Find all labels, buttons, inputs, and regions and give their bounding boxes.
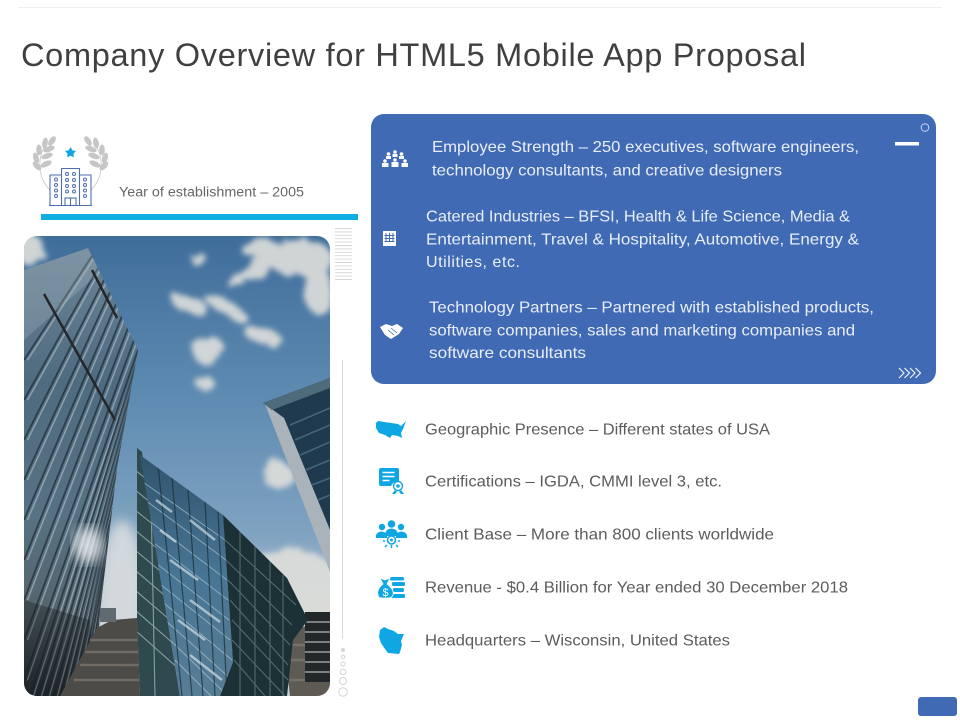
text: employee strength xyxy=(432,139,859,180)
text: employee strength: technology consultants, and creative designers xyxy=(432,162,782,180)
text: technology partners: Technology Partners – Partnered with established products, xyxy=(429,300,874,316)
icon: handshake xyxy=(380,324,403,339)
right dark tower xyxy=(263,378,330,572)
panel: company highlights xyxy=(371,114,936,384)
pale haze near the horizon xyxy=(100,514,137,626)
icon: money bag and coins: $ xyxy=(382,587,389,599)
photo: glass skyscrapers against the sky xyxy=(24,236,330,696)
icon: building xyxy=(49,168,92,206)
text: headquarters: Headquarters – Wisconsin, United States xyxy=(425,632,730,650)
text: technology partners: software consultants xyxy=(429,345,586,362)
text: geographic presence: Geographic Presence – Different states of USA xyxy=(425,422,770,438)
panel ornament: ring xyxy=(921,124,929,131)
text: catered industries: Catered Industries – BFSI, Health & Life Science, Media & xyxy=(426,208,850,226)
icon: clients xyxy=(376,520,407,548)
top rule xyxy=(18,7,942,8)
icon: employees xyxy=(382,150,408,167)
text: certifications: Certifications – IGDA, CMMI level 3, etc. xyxy=(425,474,722,490)
title: Company Overview for HTML5 Mobile App Proposal xyxy=(21,37,806,73)
year of establishment text: Year of establishment – 2005 xyxy=(119,184,304,200)
lower stone base xyxy=(60,608,330,696)
panel ornament: chevrons xyxy=(899,368,920,378)
icon: laurel wreath xyxy=(31,135,110,190)
footer button xyxy=(918,697,957,716)
icon: USA map xyxy=(376,421,406,438)
icon: star xyxy=(65,147,76,157)
text: technology partners: software companies, sales and marketing companies and xyxy=(429,322,855,340)
text: client base: Client Base – More than 800 clients worldwide xyxy=(425,526,774,544)
list row: certifications xyxy=(379,468,722,494)
list row: client base xyxy=(376,520,774,548)
text: catered industries: Utilities, etc. xyxy=(426,254,520,271)
icon: money bag and coins xyxy=(378,577,405,599)
icon: building with laurel wreath xyxy=(31,135,110,206)
middle cloud xyxy=(169,290,211,320)
decorative dots xyxy=(339,648,347,696)
list row: revenue xyxy=(378,577,848,599)
central glass building xyxy=(135,448,308,710)
left glass tower xyxy=(24,248,142,696)
sky xyxy=(24,236,330,696)
icon: office building xyxy=(383,231,396,246)
top right cloud xyxy=(268,238,332,278)
text: catered industries xyxy=(426,208,859,271)
list row: geographic presence xyxy=(376,421,770,438)
icon: certificate xyxy=(379,468,404,494)
text: revenue: Revenue - $0.4 Billion for Year ended 30 December 2018 xyxy=(425,580,848,596)
vertical side rule xyxy=(342,360,343,639)
text: technology partners xyxy=(429,300,874,362)
text: employee strength: Employee Strength – 250 executives, software engineers, xyxy=(432,139,859,156)
blue divider bar xyxy=(41,214,358,220)
clouds xyxy=(24,236,330,627)
decorative stripes xyxy=(335,228,352,280)
list row: headquarters xyxy=(379,627,730,654)
icon: Wisconsin map xyxy=(379,627,404,654)
text: catered industries: Entertainment, Travel & Hospitality, Automotive, Energy & xyxy=(426,232,859,248)
corner cloud xyxy=(16,234,44,266)
panel ornament: dash xyxy=(895,142,919,146)
lower right cloud xyxy=(262,462,294,488)
